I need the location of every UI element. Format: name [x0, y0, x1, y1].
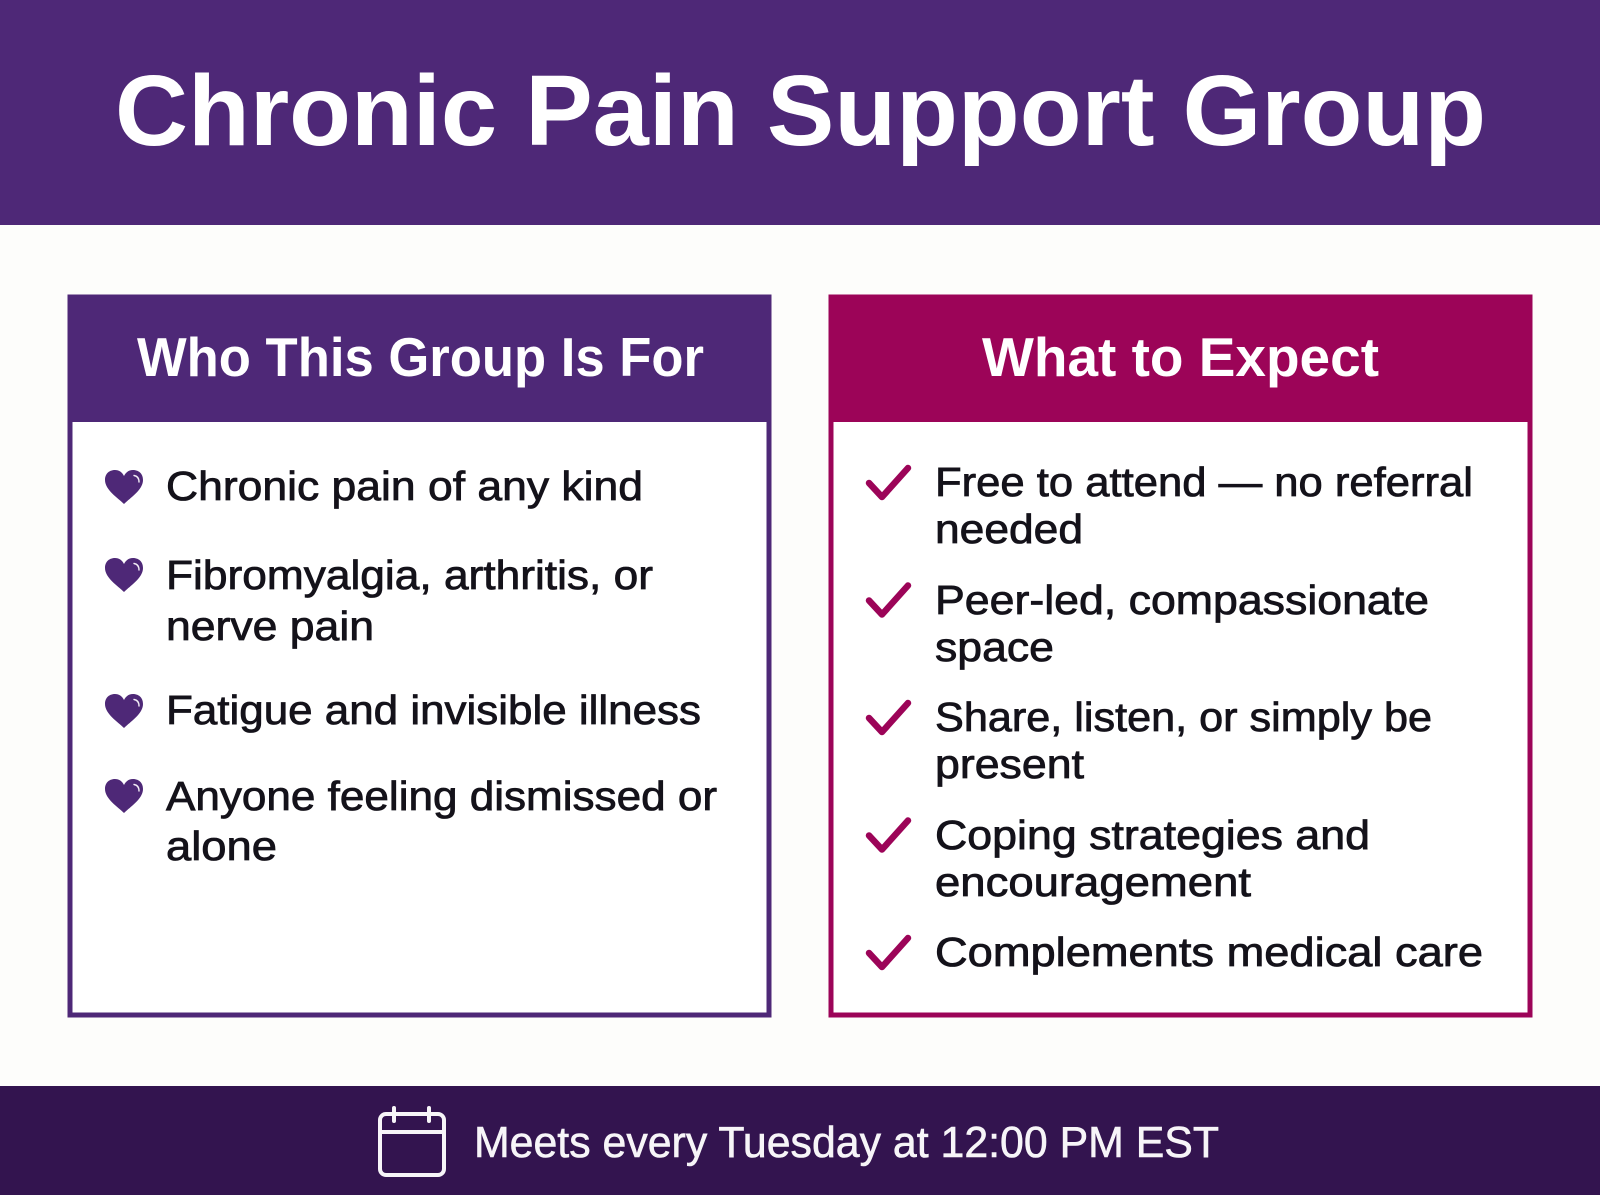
list item: coping strategies	[869, 812, 1370, 905]
list item: free to attend: Free to attend — no referral	[935, 459, 1473, 505]
icon: calendar	[380, 1108, 444, 1175]
meeting time text: Meets every Tuesday at 12:00 PM EST	[474, 1118, 1219, 1167]
list item: complements medical care: Complements medical care	[935, 929, 1483, 975]
list item: fibromyalgia	[105, 552, 653, 649]
heading: who this group is for: Who This Group Is For	[137, 326, 704, 388]
list item: peer-led	[869, 577, 1429, 670]
list item: share, listen: present	[935, 741, 1085, 787]
list item: coping strategies: encouragement	[935, 859, 1252, 905]
list item: chronic pain: Chronic pain of any kind	[166, 463, 643, 509]
list item: peer-led: space	[935, 624, 1054, 670]
list item: fibromyalgia: Fibromyalgia, arthritis, or	[166, 552, 653, 598]
list item: fatigue: Fatigue and invisible illness	[166, 687, 701, 733]
list item: fibromyalgia: nerve pain	[166, 603, 374, 649]
panel: what to expect	[829, 295, 1532, 1015]
list item: share, listen: Share, listen, or simply be	[935, 694, 1432, 740]
list item: anyone feeling dismissed: alone	[166, 823, 277, 869]
list item: free to attend	[869, 459, 1473, 552]
panel: who this group is for	[68, 295, 771, 1015]
list item: coping strategies: Coping strategies and	[935, 812, 1370, 858]
footer bar	[0, 1086, 1600, 1195]
title: Chronic Pain Support Group	[115, 55, 1486, 167]
list item: share, listen	[869, 694, 1432, 787]
list item: anyone feeling dismissed: Anyone feeling dismissed or	[166, 773, 717, 819]
heading: what to expect: What to Expect	[982, 326, 1379, 388]
header banner	[0, 0, 1600, 225]
list item: peer-led: Peer-led, compassionate	[935, 577, 1429, 623]
list item: anyone feeling dismissed	[105, 773, 717, 869]
list item: free to attend: needed	[935, 506, 1083, 552]
